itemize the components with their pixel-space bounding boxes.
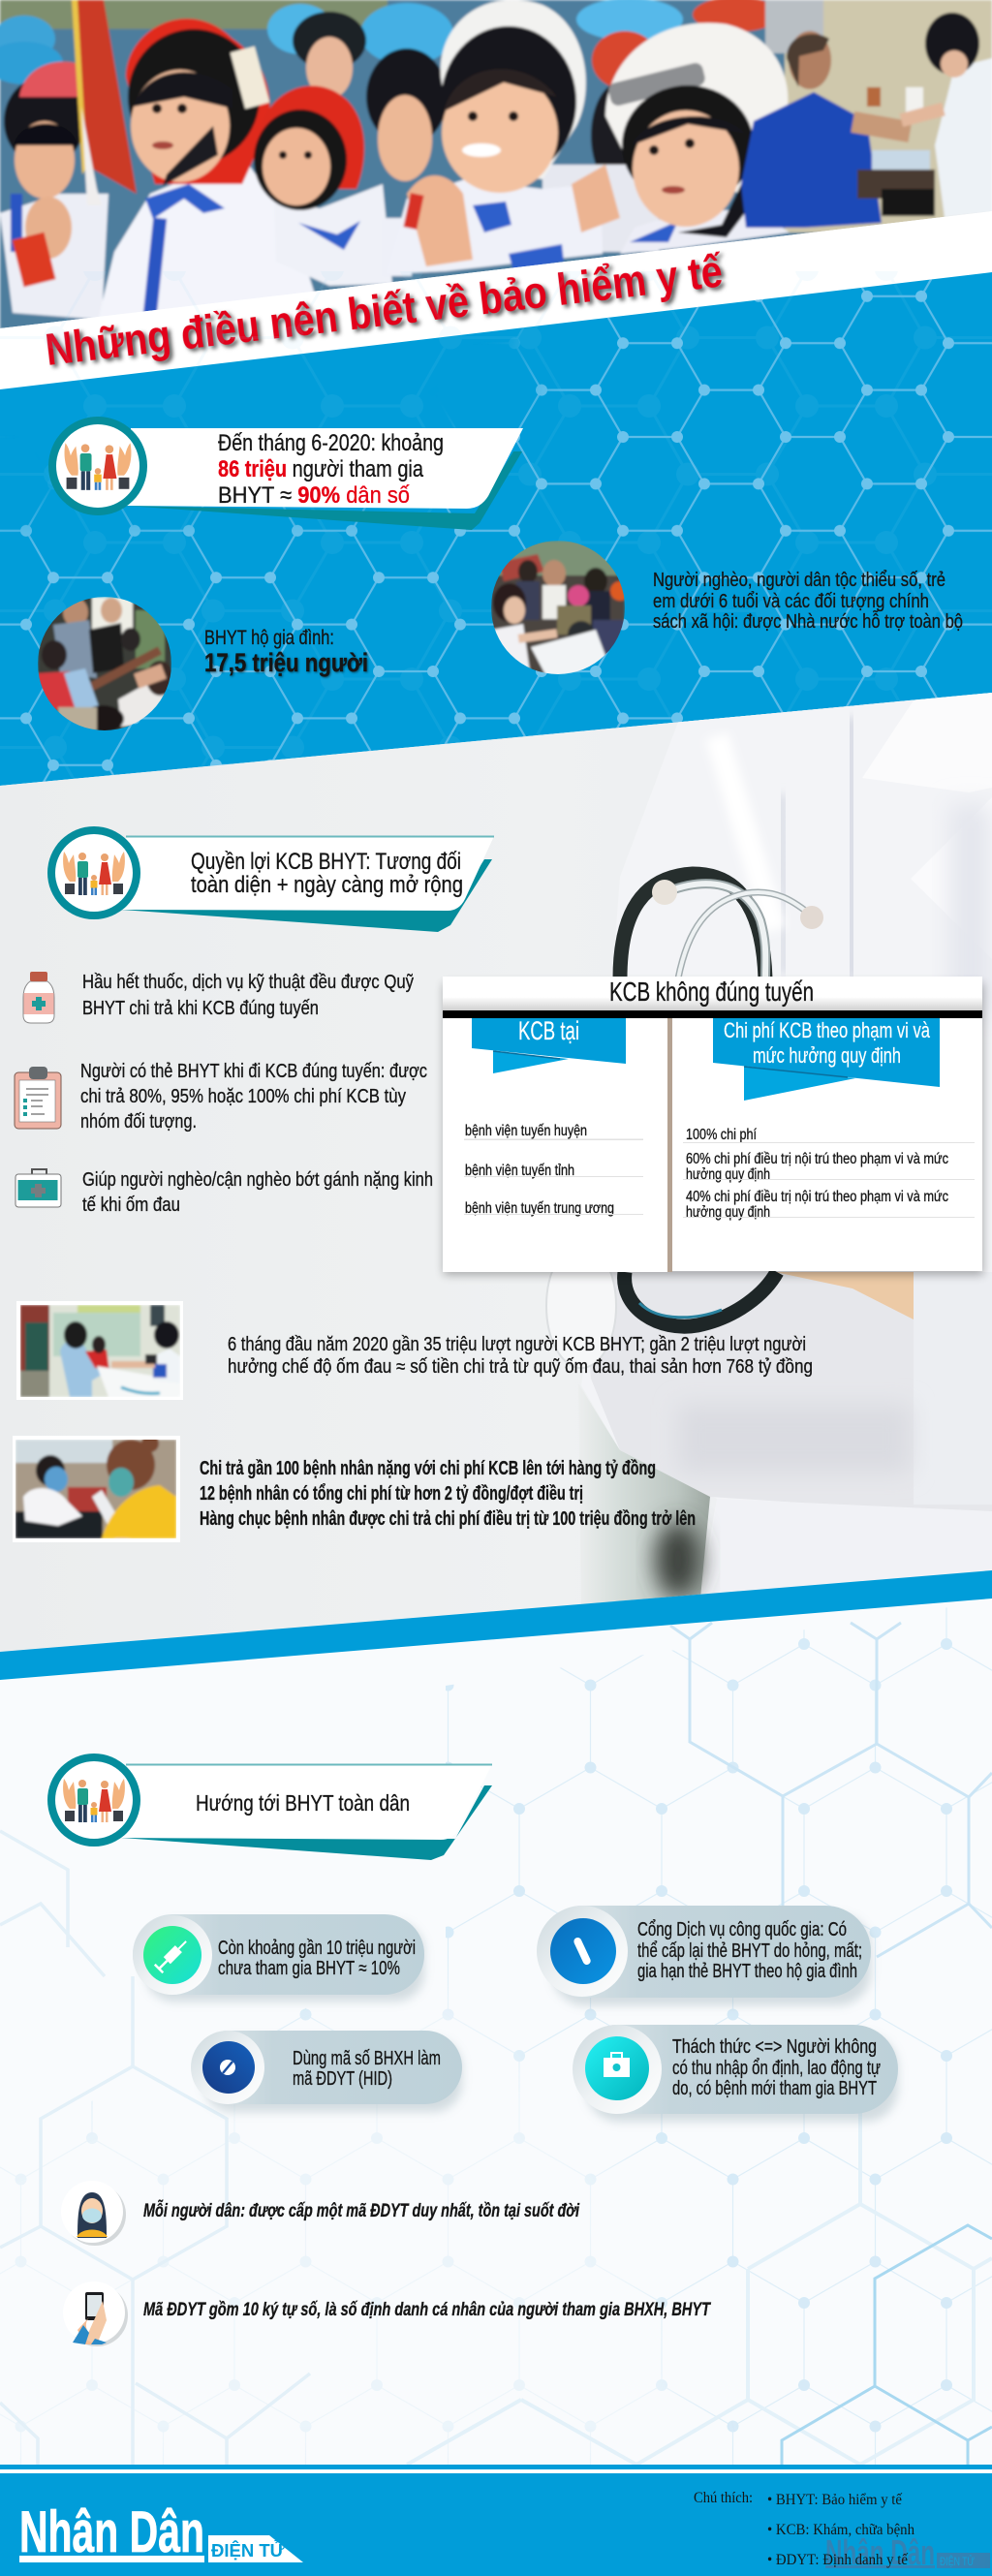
text: severe patients paid: Hàng chục bệnh nhân được chi trả chi phí điều trị từ 100 triệu đồng trở lên xyxy=(200,1508,696,1530)
watermark: Nhân Dân xyxy=(825,2532,935,2572)
text: poor households: Giúp người nghèo/cận nghèo bớt gánh nặng kinh xyxy=(82,1169,433,1191)
panel 1 heading: 86 million participants: Đến tháng 6-2020: khoảng xyxy=(218,430,444,456)
list: coverage rates: hưởng quy định xyxy=(686,1204,770,1221)
photo: ethnic minority health check xyxy=(491,541,630,678)
hexagon network pattern on blue xyxy=(0,271,992,814)
icon: phone with QR code in hand xyxy=(63,2281,128,2346)
panel 3 heading: toward universal coverage: Hướng tới BHYT toàn dân xyxy=(196,1790,410,1816)
text: household BHYT: 17,5 triệu người xyxy=(204,648,368,677)
text: household BHYT: BHYT hộ gia đình: xyxy=(204,627,334,649)
capsule: 10 million uninsured xyxy=(133,1914,424,2002)
text: severe patients paid: Chi trả gần 100 bệnh nhân nặng với chi phí KCB lên tới hàng tỷ đồng xyxy=(200,1458,656,1479)
capsule: social insurance number as HID: mã ĐDYT (HID) xyxy=(293,2068,392,2090)
ribbon: cost by scope: Chi phí KCB theo phạm vi và xyxy=(724,1018,931,1042)
list: hospital levels: bệnh viện tuyến tỉnh xyxy=(465,1163,574,1179)
kid behind xyxy=(378,95,432,276)
capsule: national public service portal xyxy=(537,1906,871,2005)
header photo: school children in helmets xyxy=(0,0,992,329)
text: 10 digit health ID: Mã ĐDYT gồm 10 ký tự số, là số định danh cá nhân của người tham gia BHXH, BHYT xyxy=(143,2299,712,2320)
ribbon: KCB tại xyxy=(472,1016,626,1073)
capsule: 10 million uninsured: Còn khoảng gần 10 triệu người xyxy=(218,1938,416,1959)
icon: syringe xyxy=(154,1938,190,1973)
text: 80 95 100 percent coverage: nhóm đối tượng. xyxy=(80,1111,197,1133)
text: first six months 2020 xyxy=(228,1334,813,1378)
blue divider band xyxy=(0,1570,992,1680)
capsule: national public service portal: thể cấp lại thẻ BHYT do hỏng, mất; xyxy=(637,1940,862,1962)
panel: KCB không đúng tuyến table xyxy=(443,977,983,1275)
capsule: social insurance number as HID xyxy=(191,2031,462,2112)
photo: pharmacy counter xyxy=(16,1301,183,1400)
panel 3 heading: toward universal coverage xyxy=(47,1754,492,1860)
text: 80 95 100 percent coverage: Người có thẻ BHYT khi đi KCB đúng tuyến: được xyxy=(80,1061,427,1082)
panel 2 heading: health care benefits xyxy=(47,826,494,932)
legend: • BHYT: Bảo hiểm y tế xyxy=(767,2492,903,2508)
capsule: social insurance number as HID: Dùng mã số BHXH làm xyxy=(293,2048,441,2069)
text: state-supported groups xyxy=(653,570,963,633)
ribbon: cost by scope xyxy=(713,1018,940,1101)
list: hospital levels: bệnh viện tuyến trung ương xyxy=(465,1200,614,1217)
list: coverage rates xyxy=(683,1127,975,1221)
capsule: 10 million uninsured: chưa tham gia BHYT ≈ 10% xyxy=(218,1958,400,1979)
panel: blue section background xyxy=(0,272,992,786)
kid boy right xyxy=(605,23,790,254)
capsule: the challenge: Thách thức <=> Người không xyxy=(672,2036,877,2058)
legend xyxy=(694,2490,914,2568)
icon: thermometer xyxy=(573,1937,592,1966)
text: household BHYT xyxy=(204,627,368,677)
text: 80 95 100 percent coverage xyxy=(80,1061,427,1133)
ribbon: cost by scope: mức hưởng quy định xyxy=(753,1043,901,1068)
man in blue shirt and nurse xyxy=(741,13,992,228)
logo: Nhân Dân Điện Tử: ĐIỆN TỬ xyxy=(211,2540,285,2560)
legend: Chú thích: xyxy=(694,2490,753,2506)
footer xyxy=(0,2465,992,2576)
capsule: national public service portal: Cổng Dịch vụ công quốc gia: Có xyxy=(637,1919,847,1940)
icon: medical case xyxy=(604,2053,630,2077)
list: hospital levels: bệnh viện tuyến huyện xyxy=(465,1123,587,1139)
icon: pill xyxy=(220,2060,235,2075)
text: one unique health ID: Mỗi người dân: được cấp một mã ĐDYT duy nhất, tồn tại suốt đời xyxy=(143,2199,579,2221)
icon: first-aid case xyxy=(16,1169,61,1207)
panel 2 heading: health care benefits: toàn diện + ngày càng mở rộng xyxy=(191,872,463,898)
title: Những điều nên biết về bảo hiểm y tế xyxy=(43,245,726,375)
list: coverage rates: 100% chi phí xyxy=(686,1127,758,1143)
hexagon network pattern on white xyxy=(0,1589,992,2470)
text: first six months 2020: 6 tháng đầu năm 2020 gần 35 triệu lượt người KCB BHYT; gần 2 triệu lượt người xyxy=(228,1334,806,1355)
panel 2 heading: health care benefits: Quyền lợi KCB BHYT: Tương đối xyxy=(191,849,461,875)
text: 80 95 100 percent coverage: chi trả 80%, 95% hoặc 100% chi phí KCB tùy xyxy=(80,1086,406,1107)
watermark: ĐIỆN TỬ xyxy=(940,2554,975,2568)
panel 1 heading: 86 million participants: 86 triệu người tham gia xyxy=(218,456,424,482)
kid girl center-left xyxy=(254,86,392,286)
text: drugs covered: Hầu hết thuốc, dịch vụ kỹ thuật đều được Quỹ xyxy=(82,972,414,993)
icon: medicine bottle xyxy=(23,972,54,1023)
text: severe patients paid xyxy=(200,1458,696,1530)
icon: clipboard xyxy=(15,1067,61,1129)
text: first six months 2020: hưởng chế độ ốm đau ≈ số tiền chi trả từ quỹ ốm đau, thai sản hơn 768 tỷ đồng xyxy=(228,1356,813,1378)
panel: white-coat doctor background xyxy=(0,678,992,1657)
logo: Nhân Dân Điện Tử: Nhân Dân xyxy=(19,2499,204,2564)
text: poor households xyxy=(82,1169,433,1216)
kid far left xyxy=(0,62,108,320)
kid boy left-center xyxy=(97,18,317,325)
capsule: national public service portal: gia hạn thẻ BHYT theo hộ gia đình xyxy=(637,1961,857,1982)
photo: masked staff and patient xyxy=(13,1435,180,1542)
text: poor households: tế khi ốm đau xyxy=(82,1195,180,1216)
list: coverage rates: hưởng quy định xyxy=(686,1166,770,1183)
icon: woman with mask xyxy=(61,2181,126,2246)
legend: • ĐDYT: Định danh y tế xyxy=(767,2552,909,2568)
table title: KCB không đúng tuyến xyxy=(609,977,814,1007)
text: drugs covered xyxy=(82,972,414,1019)
white title band xyxy=(0,211,992,389)
stethoscope xyxy=(546,874,823,1368)
capsule: the challenge: có thu nhập ổn định, lao động tự xyxy=(672,2058,881,2079)
red banner xyxy=(72,0,137,205)
text: severe patients paid: 12 bệnh nhân có tổng chi phí từ hơn 2 tỷ đồng/đợt điều trị xyxy=(200,1483,583,1505)
legend: • KCB: Khám, chữa bệnh xyxy=(767,2522,914,2538)
kid girl main center xyxy=(386,0,620,274)
list: hospital levels xyxy=(464,1123,643,1217)
ribbon: KCB tại: KCB tại xyxy=(518,1016,579,1045)
panel 1 heading: 86 million participants xyxy=(48,417,523,530)
panel 1 heading: 86 million participants: BHYT ≈ 90% dân số xyxy=(218,482,410,509)
text: state-supported groups: em dưới 6 tuổi và các đối tượng chính xyxy=(653,591,929,612)
capsule: the challenge xyxy=(573,2025,898,2122)
photo: household registration xyxy=(38,597,174,732)
capsule: the challenge: do, có bệnh mới tham gia BHYT xyxy=(672,2078,877,2099)
text: drugs covered: BHYT chi trả khi KCB đúng tuyến xyxy=(82,998,319,1019)
